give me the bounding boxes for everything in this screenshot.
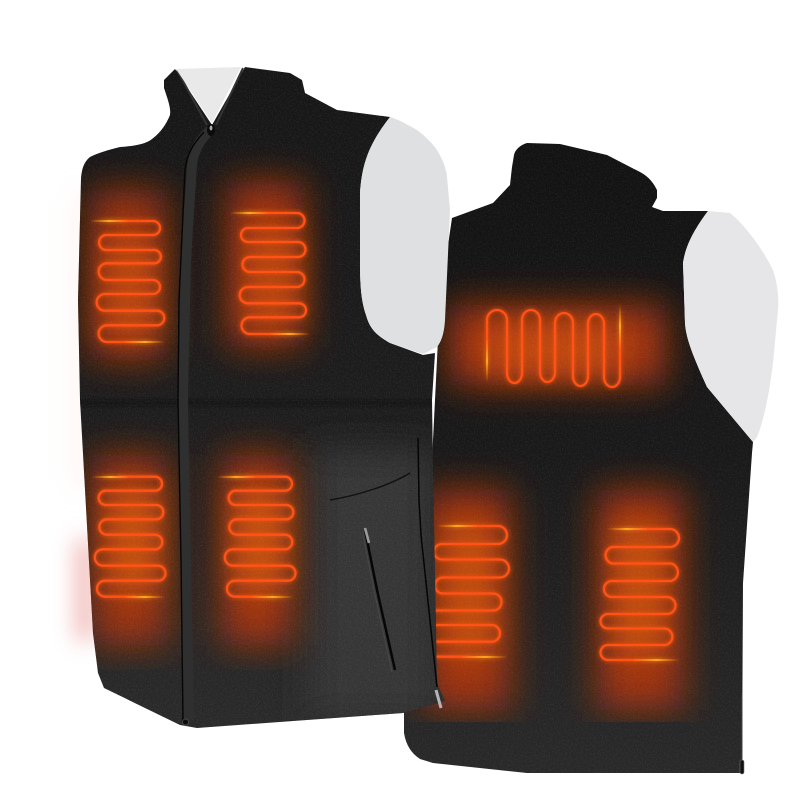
coil: back upper neck panel — [486, 304, 621, 387]
zipper head at neck — [207, 124, 215, 136]
back vest body — [404, 143, 753, 773]
hem zip pull — [436, 690, 441, 708]
coil: front upper left panel — [90, 220, 165, 343]
side seam — [418, 438, 437, 687]
coil: front lower left panel — [92, 476, 166, 598]
front arm opening — [360, 117, 450, 354]
back arm opening — [683, 211, 778, 442]
pocket zipper flap — [363, 535, 392, 672]
front vest heat glow and fleece — [78, 67, 444, 728]
coil: back lower right panel — [600, 528, 680, 661]
front vest — [78, 67, 445, 728]
collar opening edge — [177, 68, 243, 125]
pink heat haze left of front vest — [76, 190, 94, 640]
centre zipper — [183, 130, 210, 722]
zipper stop at hem — [182, 719, 188, 725]
back vest — [404, 143, 753, 774]
back zip pull — [740, 760, 744, 774]
zipper edge line — [178, 132, 204, 722]
pocket crease — [330, 473, 410, 500]
illustration: heated vest, front and back — [62, 67, 778, 774]
pocket zip pull — [365, 528, 369, 543]
front vest body — [78, 67, 445, 728]
side zip on back vest — [741, 695, 743, 770]
coil: front lower right panel — [217, 476, 296, 598]
coil: back lower left panel — [430, 525, 509, 658]
coil: front upper right panel — [230, 212, 310, 335]
back vest heat glow — [400, 130, 780, 790]
white collar interior — [176, 67, 241, 123]
pocket zipper — [365, 530, 395, 670]
